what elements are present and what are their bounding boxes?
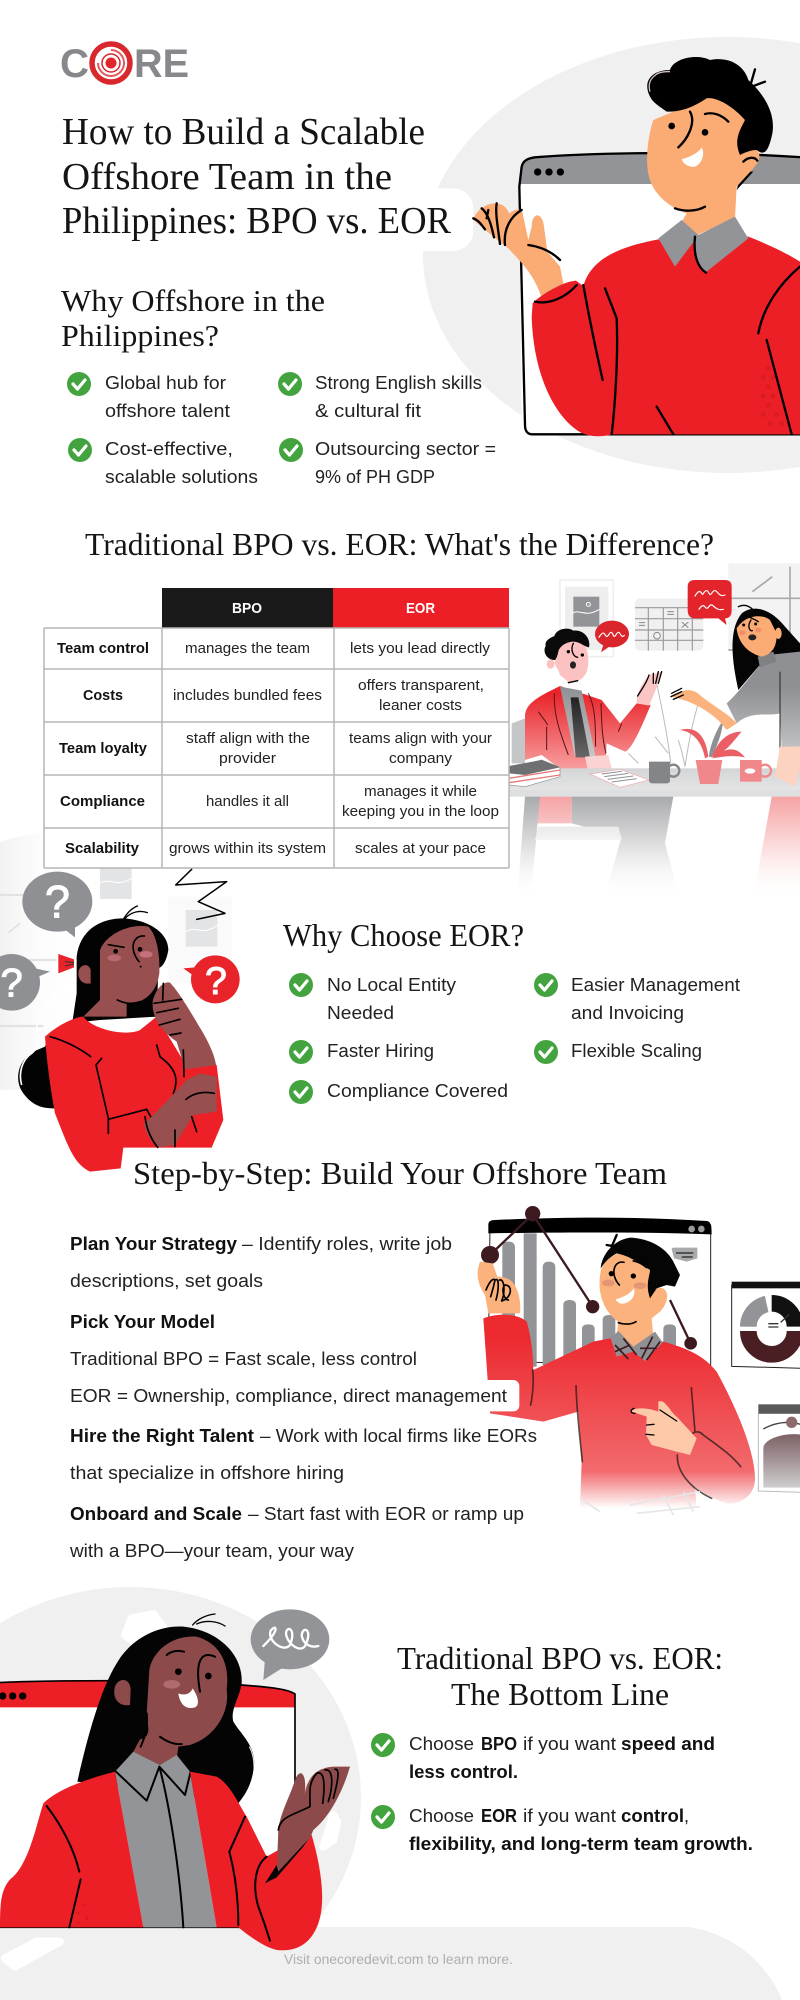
jacket right with sleeve: [190, 1772, 322, 1950]
question bubble: large grey: [22, 872, 92, 937]
desk legs fade: [517, 797, 800, 907]
checklist: why offshore: [67, 372, 496, 487]
header: EOR: [333, 588, 509, 628]
illustration: woman at browser window: [0, 1609, 350, 1967]
footer note: Visit onecoredevit.com to learn more.: [284, 1952, 513, 1967]
row: compliance: Compliance: [60, 794, 145, 810]
item: no local entity: [289, 973, 456, 1023]
item: global hub: Global hub for: [105, 373, 226, 393]
paper: [590, 769, 649, 787]
background blob: bottom left: [0, 1587, 361, 2000]
step: pick your model: Pick Your Model: [70, 1312, 215, 1332]
heading: step by step: Step-by-Step: Build Your Offshore Team: [133, 1155, 667, 1191]
raised arm and hand: [153, 982, 216, 1077]
row: costs: includes bundled fees: [173, 688, 322, 704]
row: compliance: [60, 784, 499, 820]
question bubble: left grey: [0, 954, 50, 1011]
row: team loyalty: teams align with your: [349, 731, 492, 747]
item: choose EOR: Choose: [409, 1806, 474, 1826]
item: global hub: offshore talent: [105, 401, 230, 421]
row: costs: [83, 678, 484, 714]
logo: [60, 42, 189, 86]
item: choose BPO: Choose: [409, 1734, 474, 1754]
white tab behind text: [463, 1380, 519, 1411]
item: choose EOR: control: [621, 1806, 684, 1826]
background blob: top right: [423, 37, 800, 473]
row: team control: Team control: [57, 641, 149, 657]
illustration: office meeting: [508, 563, 800, 907]
step: plan your strategy: descriptions, set goals: [70, 1271, 263, 1291]
row: compliance: keeping you in the loop: [342, 804, 499, 820]
row: scalability: grows within its system: [169, 841, 326, 857]
browser window: [0, 1681, 295, 1927]
long hair: [77, 1614, 254, 1803]
item: choose EOR: flexibility, and long-term team growth.: [409, 1834, 753, 1854]
step: pick your model: Traditional BPO = Fast scale, less control: [70, 1349, 417, 1369]
row: team loyalty: provider: [219, 751, 276, 767]
heading: bottom line: The Bottom Line: [451, 1676, 669, 1712]
step: pick your model: [70, 1312, 507, 1406]
illustration: man at browser window: [407, 57, 800, 436]
item: faster hiring: [289, 1040, 434, 1064]
row: team loyalty: company: [389, 751, 453, 767]
row: scalability: scales at your pace: [355, 841, 486, 857]
sweater: [532, 237, 800, 436]
item: cost effective: [68, 438, 258, 487]
row: scalability: [65, 841, 486, 857]
steps text: [69, 1234, 537, 1561]
illustration: thinking woman: [0, 868, 240, 1172]
logo letters RE: RE: [134, 42, 189, 86]
table grid: [44, 628, 509, 868]
logo letter C: C: [60, 42, 89, 86]
note icon: [672, 1248, 697, 1262]
step: plan your strategy: [70, 1234, 452, 1291]
lower hand: [144, 1073, 217, 1147]
item: compliance covered: Compliance Covered: [327, 1081, 508, 1101]
title: Philippines: BPO vs. EOR: [62, 200, 452, 242]
heading: why offshore: [61, 283, 325, 353]
item: outsourcing sector: Outsourcing sector =: [315, 439, 496, 459]
raised hand: [478, 1262, 520, 1313]
step: onboard and scale: [69, 1504, 524, 1561]
heading: why offshore: Why Offshore in the: [61, 283, 325, 318]
speech bubble: woman: [688, 580, 732, 625]
step: hire the right talent: Hire the Right Talent: [70, 1426, 254, 1446]
row: team control: [57, 641, 491, 657]
row: team loyalty: Team loyalty: [59, 741, 147, 757]
grey mug: [649, 762, 679, 783]
item: choose BPO: less control.: [409, 1762, 518, 1782]
step: onboard and scale: – Start fast with EOR or ramp up: [248, 1504, 524, 1524]
item: easier management: [534, 973, 740, 1023]
heading: why offshore: Philippines?: [61, 318, 219, 353]
item: choose BPO: if you want: [523, 1734, 616, 1754]
table body: [44, 628, 509, 868]
wall window: [728, 563, 800, 651]
faint background window: [0, 868, 232, 1026]
desk: [508, 768, 800, 797]
item: no local entity: Needed: [327, 1003, 394, 1023]
seated man: [525, 629, 662, 775]
item: cost effective: scalable solutions: [105, 467, 258, 487]
row: scalability: Scalability: [65, 841, 139, 857]
grey shirt and collar: [115, 1752, 217, 1927]
row: team control: manages the team: [185, 641, 310, 657]
header: EOR: EOR: [406, 601, 435, 617]
plaid collar: [611, 1331, 663, 1361]
face and neck: [78, 926, 159, 1017]
item: english skills: Strong English skills: [315, 373, 482, 393]
hand: [265, 1767, 350, 1883]
books: [509, 760, 560, 787]
wall calendar: [635, 598, 703, 651]
question bubble: left grey: ?: [1, 962, 23, 1006]
step: plan your strategy: – Identify roles, write job: [242, 1234, 452, 1254]
chart bars: [502, 1233, 676, 1367]
item: easier management: and Invoicing: [571, 1003, 684, 1023]
pointing hand: [630, 1401, 697, 1455]
chair: [512, 718, 525, 763]
head: [647, 57, 773, 235]
step: hire the right talent: – Work with local firms like EORs: [260, 1426, 537, 1446]
mini window: donut chart: [732, 1282, 800, 1368]
row: team control: lets you lead directly: [350, 641, 491, 657]
jacket left: [0, 1772, 143, 1927]
question bubble: red: [183, 955, 240, 1003]
item: flexible scaling: [534, 1040, 702, 1064]
standing woman: [671, 605, 800, 787]
plant: [680, 720, 745, 784]
title: How to Build a Scalable: [62, 111, 425, 153]
step: pick your model: EOR = Ownership, compliance, direct management: [70, 1386, 507, 1406]
item: compliance covered: [289, 1080, 508, 1104]
item: choose BPO: [371, 1733, 715, 1782]
background band: footer: [0, 1927, 782, 2000]
background fade: left of thinking woman: [0, 833, 80, 1090]
item: faster hiring: Faster Hiring: [327, 1041, 434, 1061]
item: choose EOR: ,: [684, 1806, 689, 1826]
wall picture: [560, 580, 613, 657]
title: Offshore Team in the: [62, 156, 392, 198]
white blobs on background: [5, 1614, 337, 1967]
row: team loyalty: staff align with the: [186, 731, 310, 747]
row: compliance: manages it while: [364, 784, 477, 800]
item: outsourcing sector: 9% of PH GDP: [315, 467, 435, 487]
head: [600, 1235, 680, 1352]
item: english skills: & cultural fit: [315, 401, 421, 421]
item: choose BPO: BPO: [481, 1734, 517, 1754]
red top: [45, 1017, 223, 1172]
item: outsourcing sector: [279, 438, 496, 487]
background plant stems: [628, 683, 698, 767]
item: easier management: Easier Management: [571, 975, 740, 995]
step: hire the right talent: that specialize in offshore hiring: [70, 1463, 344, 1483]
row: costs: leaner costs: [379, 698, 462, 714]
browser window: [519, 153, 800, 434]
speech bubble: [251, 1609, 329, 1680]
heading: bottom line: [397, 1640, 723, 1712]
collar: [658, 217, 748, 273]
face and neck: [114, 1637, 227, 1765]
zigzag stress line: [176, 869, 227, 919]
item: no local entity: No Local Entity: [327, 975, 456, 995]
row: costs: Costs: [83, 688, 123, 704]
row: team loyalty: [59, 731, 492, 767]
chart window: [488, 1218, 712, 1365]
item: cost effective: Cost-effective,: [105, 439, 233, 459]
illustration: man presenting chart: [463, 1206, 800, 1515]
item: choose EOR: [371, 1805, 753, 1854]
sweater: [483, 1315, 755, 1508]
step: onboard and scale: Onboard and Scale: [70, 1504, 242, 1524]
chart line and points: [481, 1206, 697, 1350]
checklist: bottom line: [371, 1733, 753, 1854]
item: choose EOR: EOR: [481, 1806, 517, 1826]
item: choose EOR: if you want: [523, 1806, 616, 1826]
title: [62, 111, 452, 242]
notch behind title: [407, 188, 473, 251]
heading: bottom line: Traditional BPO vs. EOR:: [397, 1640, 723, 1676]
pink mug: [740, 760, 771, 782]
checklist: why choose EOR: [289, 973, 740, 1104]
header: BPO: [162, 588, 333, 628]
item: choose BPO: speed and: [621, 1734, 715, 1754]
header: BPO: BPO: [232, 601, 262, 617]
question bubble: large grey: ?: [45, 876, 70, 927]
table: BPO vs EOR comparison: [44, 588, 509, 868]
item: english skills: [278, 372, 482, 421]
item: global hub: [67, 372, 230, 421]
hand: [473, 203, 564, 303]
item: flexible scaling: Flexible Scaling: [571, 1041, 702, 1061]
row: compliance: handles it all: [206, 794, 289, 810]
heading: why choose EOR: Why Choose EOR?: [283, 917, 524, 953]
step: plan your strategy: Plan Your Strategy: [70, 1234, 237, 1254]
heading: BPO vs EOR difference: Traditional BPO vs. EOR: What's the Difference?: [85, 526, 714, 562]
question bubble: red: ?: [205, 959, 227, 1003]
mini window: hill chart: [758, 1404, 800, 1492]
hair: [18, 906, 168, 1108]
shirt hem: [580, 1492, 700, 1515]
step: onboard and scale: with a BPO—your team, your way: [69, 1541, 354, 1561]
row: costs: offers transparent,: [358, 678, 484, 694]
logo swirl: [92, 44, 130, 82]
step: hire the right talent: [70, 1426, 537, 1483]
speech bubble: man: [595, 621, 629, 652]
